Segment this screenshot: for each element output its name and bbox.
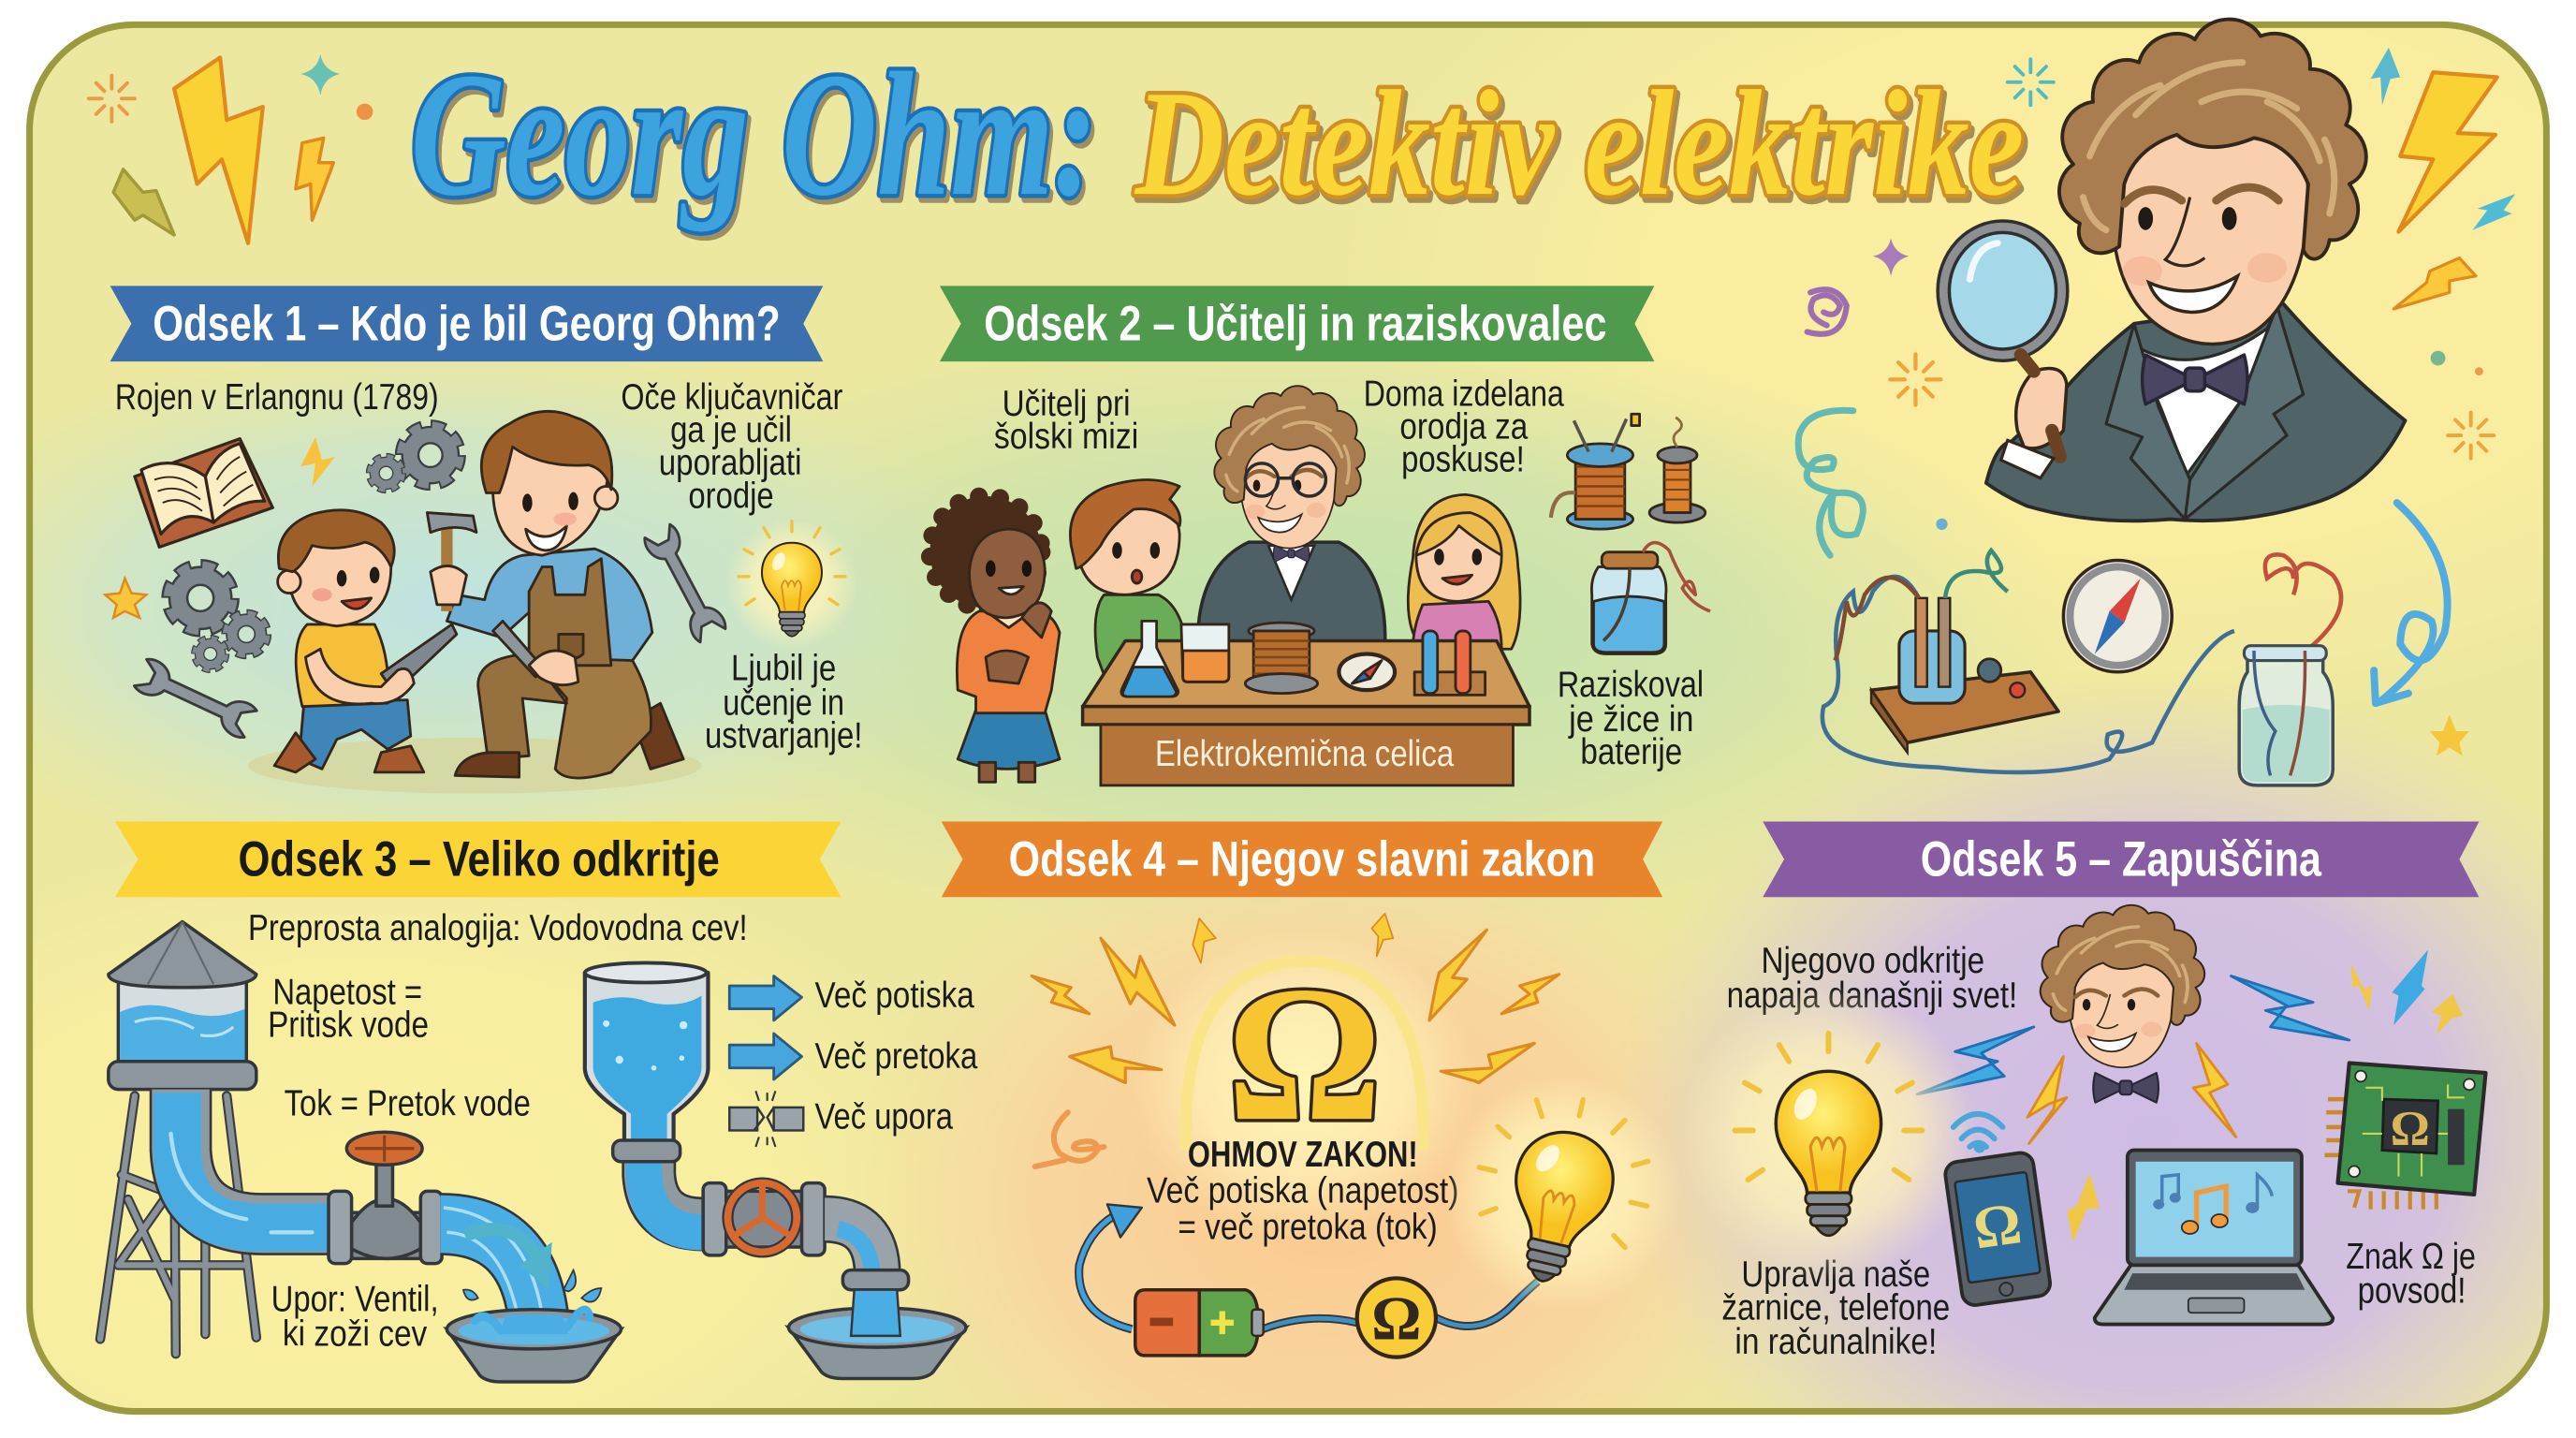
ribbon 2 bbox=[940, 286, 1654, 361]
squiggle teal bbox=[1798, 410, 1863, 555]
text: teacher at desk bbox=[994, 384, 1138, 457]
text: home-made tools: Doma izdelana bbox=[1364, 374, 1564, 414]
icon: star bbox=[105, 579, 146, 618]
section 4 bbox=[942, 822, 1680, 1357]
text: home-made tools bbox=[1364, 374, 1564, 480]
text: loved learning bbox=[705, 649, 862, 756]
text: legend: Več pretoka bbox=[815, 1036, 978, 1077]
text: Ohm's law: = več pretoka (tok) bbox=[1178, 1207, 1438, 1247]
text: father locksmith: Oče ključavničar bbox=[621, 377, 842, 418]
text: wires and batteries bbox=[1558, 665, 1704, 772]
icons: coils bbox=[1551, 414, 1705, 529]
text: home-made tools: orodja za bbox=[1399, 407, 1529, 448]
curly arrow blue bbox=[2382, 503, 2448, 700]
text: father locksmith: uporabljati bbox=[659, 443, 801, 483]
text: Ohm's law: Več potiska (napetost) bbox=[1147, 1171, 1459, 1211]
icon: phone bbox=[1944, 1152, 2052, 1307]
ribbon 3: Odsek 3 – Veliko odkritje bbox=[238, 831, 720, 887]
text: teacher at desk: šolski mizi bbox=[994, 417, 1138, 457]
text: loved learning: učenje in bbox=[723, 682, 844, 723]
figure: girl with curly hair bbox=[929, 496, 1060, 782]
decoration: top-right bolts and sparkles bbox=[1798, 48, 2515, 756]
section 5 bbox=[1680, 822, 2485, 1362]
ribbon 5: Odsek 5 – Zapuščina bbox=[1921, 831, 2322, 887]
ribbon 2: Odsek 2 – Učitelj in raziskovalec bbox=[984, 296, 1606, 351]
desk bbox=[1083, 640, 1530, 785]
hand bbox=[2016, 368, 2067, 448]
text: powers today's world: Njegovo odkritje bbox=[1761, 941, 1984, 981]
icons: gears bbox=[169, 427, 459, 669]
handle bbox=[2021, 355, 2060, 457]
figure: teacher bbox=[1197, 386, 1385, 649]
figure: blonde girl bbox=[1408, 494, 1520, 649]
text: wires and batteries: Raziskoval bbox=[1558, 665, 1704, 705]
text: electrochemical cell: Elektrokemična celica bbox=[1155, 734, 1455, 774]
ribbon 5 bbox=[1763, 822, 2479, 897]
figure: boy with saw bbox=[274, 510, 457, 772]
icon: orange swirl bbox=[1035, 1112, 1104, 1167]
text: omega everywhere: Znak Ω je bbox=[2346, 1237, 2476, 1277]
text: analogy: Preprosta analogija: Vodovodna cev! bbox=[248, 908, 748, 948]
icons: wrenches bbox=[133, 523, 728, 740]
text: teacher at desk: Učitelj pri bbox=[1003, 384, 1131, 424]
icon: Ohm head bbox=[2041, 905, 2204, 1103]
ribbon 4 bbox=[942, 822, 1662, 897]
icon: omega with halo bbox=[1132, 929, 1477, 1240]
text: resistance: Upor: Ventil, bbox=[271, 1280, 439, 1320]
text: voltage bbox=[268, 972, 429, 1045]
title part: Georg Ohm: Georg Ohm: bbox=[414, 40, 1101, 237]
title bbox=[411, 36, 2027, 237]
text: loved learning: Ljubil je bbox=[731, 649, 836, 689]
head bbox=[2059, 20, 2366, 344]
text: Ohm's law bbox=[1147, 1135, 1459, 1247]
text: father locksmith: ga je učil bbox=[670, 410, 792, 450]
icons: lightning bolts around omega bbox=[1032, 914, 1559, 1083]
text: omega everywhere: povsod! bbox=[2358, 1271, 2466, 1312]
section 3 bbox=[100, 822, 978, 1382]
circuit: battery, resistor, bulb: Ω bbox=[1371, 1284, 1422, 1353]
icon: arrows legend bbox=[729, 976, 803, 1147]
title part: Detektiv elektrike: Detektiv elektrike bbox=[1137, 64, 2027, 231]
title part: Georg Ohm: Georg Ohm: bbox=[411, 36, 1097, 232]
icon: small bolt bbox=[300, 437, 335, 486]
icon: open book bbox=[135, 439, 272, 547]
decoration: top-left bolts and sparkles bbox=[89, 54, 373, 243]
icon: outlet water with bowl bbox=[440, 1208, 621, 1382]
icon: circuit board bbox=[2324, 1064, 2485, 1210]
icon: wifi bbox=[1954, 1114, 2002, 1151]
text: runs bulbs, phones and computers: in računalnike! bbox=[1734, 1322, 1937, 1362]
shirt and collar bbox=[2134, 309, 2277, 475]
icon: light bulb bbox=[726, 518, 857, 649]
icons: bolts bbox=[1917, 949, 2463, 1242]
jar bbox=[2239, 657, 2333, 785]
circuit: battery, resistor, bulb bbox=[1079, 1075, 1680, 1357]
figure: ground shadow bbox=[248, 738, 701, 794]
icon: omega with halo: Ω bbox=[1227, 946, 1382, 1161]
magnifying glass bbox=[1943, 227, 2062, 355]
portrait: Georg Ohm with magnifying glass bbox=[1943, 20, 2405, 521]
text: wires and batteries: baterije bbox=[1580, 732, 1682, 772]
title part: Detektiv elektrike: Detektiv elektrike bbox=[1134, 59, 2024, 227]
icon: phone: Ω bbox=[1969, 1190, 2026, 1262]
text: current: Tok = Pretok vode bbox=[285, 1084, 531, 1124]
text: voltage: Napetost = bbox=[272, 972, 422, 1012]
text: father locksmith bbox=[621, 377, 842, 516]
text: loved learning: ustvarjanje! bbox=[705, 716, 862, 756]
text: legend bbox=[815, 976, 978, 1137]
cuff bbox=[2001, 440, 2054, 478]
text: resistance: ki zoži cev bbox=[283, 1313, 428, 1354]
text: powers today's world: napaja današnji svet! bbox=[1727, 976, 2017, 1016]
section 2 bbox=[929, 286, 1710, 785]
text: home-made tools: poskuse! bbox=[1401, 440, 1525, 480]
ribbon 1 bbox=[110, 286, 823, 361]
text: Ohm's law: OHMOV ZAKON! bbox=[1188, 1135, 1418, 1175]
icon: light bulb bbox=[1680, 986, 1976, 1282]
icon: right funnel pipe bbox=[585, 962, 966, 1378]
icon: circuit board: Ω bbox=[2391, 1102, 2430, 1156]
text: father locksmith: orodje bbox=[688, 476, 774, 516]
text: legend: Več upora bbox=[815, 1097, 953, 1137]
jacket bbox=[1986, 302, 2405, 521]
ribbon 3 bbox=[115, 822, 842, 897]
text: runs bulbs, phones and computers: Upravlja naše bbox=[1741, 1255, 1930, 1295]
ribbon 1: Odsek 1 – Kdo je bil Georg Ohm? bbox=[153, 296, 781, 351]
text: voltage: Pritisk vode bbox=[268, 1005, 429, 1045]
ribbon 4: Odsek 4 – Njegov slavni zakon bbox=[1009, 831, 1595, 887]
figure: father with hammer bbox=[427, 411, 683, 778]
icon: left pipe bbox=[171, 1090, 339, 1232]
section 1 bbox=[105, 286, 862, 794]
text: legend: Več potiska bbox=[815, 976, 974, 1016]
bow tie bbox=[2143, 355, 2247, 404]
icon: laptop bbox=[2095, 1151, 2333, 1325]
icon: jar with wire bbox=[1591, 543, 1710, 654]
icon: water tower bbox=[100, 922, 256, 1354]
text: powers today's world bbox=[1727, 941, 2017, 1016]
text: runs bulbs, phones and computers bbox=[1721, 1255, 1950, 1362]
text: wires and batteries: je žice in bbox=[1568, 699, 1694, 740]
icons: lab equipment on desk bbox=[1121, 621, 1486, 697]
text: runs bulbs, phones and computers: žarnice, telefone bbox=[1721, 1287, 1950, 1328]
figure: boy in green bbox=[1070, 479, 1186, 683]
wood base with cell bbox=[1871, 672, 2058, 742]
compass bbox=[2063, 560, 2172, 672]
text: resistance bbox=[271, 1280, 439, 1354]
text: omega everywhere bbox=[2346, 1237, 2476, 1312]
icon: valve bbox=[329, 1132, 442, 1264]
wires bbox=[1822, 577, 2234, 772]
text: born: Rojen v Erlangnu (1789) bbox=[115, 377, 439, 418]
apparatus: battery, compass and jar bbox=[1822, 550, 2341, 785]
